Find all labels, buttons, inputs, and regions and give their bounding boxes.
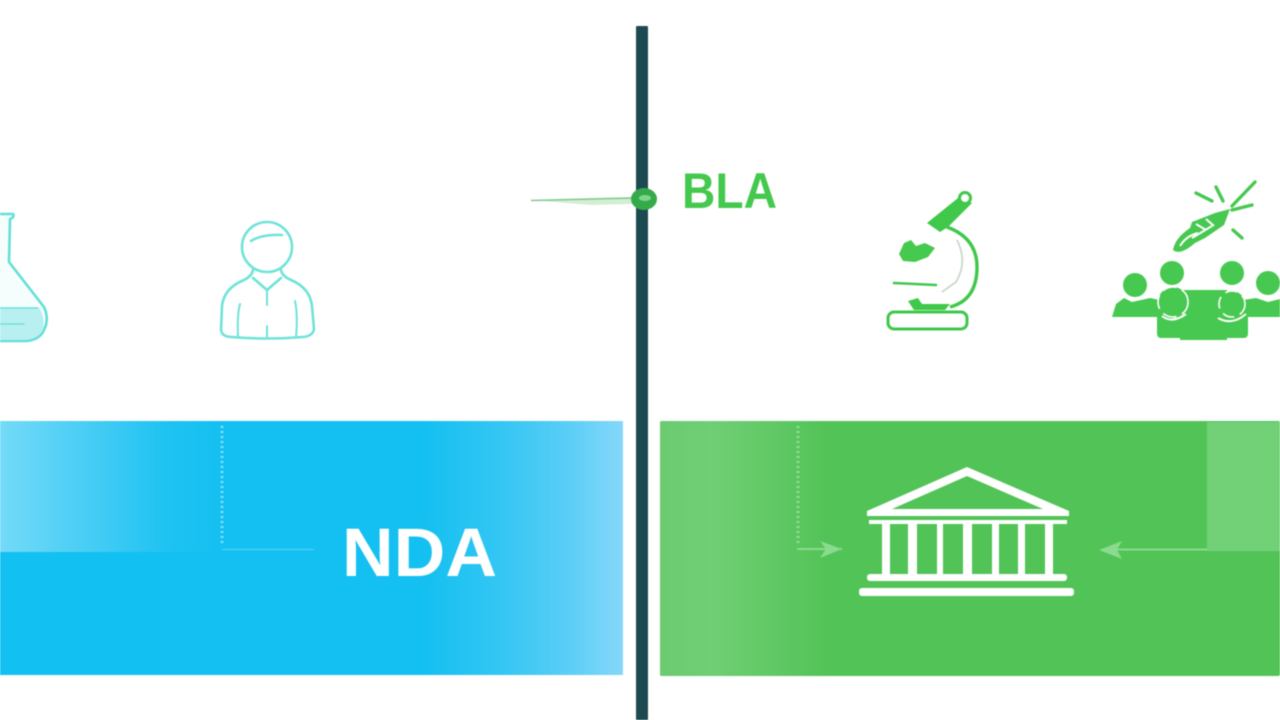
plant sprig — [1173, 182, 1255, 252]
icon: person — [221, 222, 314, 338]
panel: NDA blue band — [0, 421, 623, 675]
arrow: right to institution — [1099, 541, 1207, 559]
icon: government building — [859, 467, 1074, 596]
arrow: left to institution — [797, 541, 842, 558]
dotted vertical connector — [796, 426, 800, 546]
label: BLA: BLA — [682, 163, 777, 219]
dotted vertical connector — [220, 426, 224, 546]
panel: BLA green band — [660, 421, 1280, 676]
horizontal connector — [222, 548, 314, 550]
green band faded left area — [660, 421, 830, 676]
label: NDA: NDA — [342, 514, 497, 591]
icon: plant and group of people — [1112, 182, 1280, 340]
center divider line — [636, 26, 648, 720]
people group — [1112, 261, 1280, 340]
marker: pointer and node on divider — [531, 188, 657, 210]
green band light upper-right block — [1207, 422, 1280, 551]
icon: microscope — [888, 192, 977, 329]
icon: flask — [0, 214, 47, 341]
blue band faded upper-left area — [0, 421, 222, 552]
